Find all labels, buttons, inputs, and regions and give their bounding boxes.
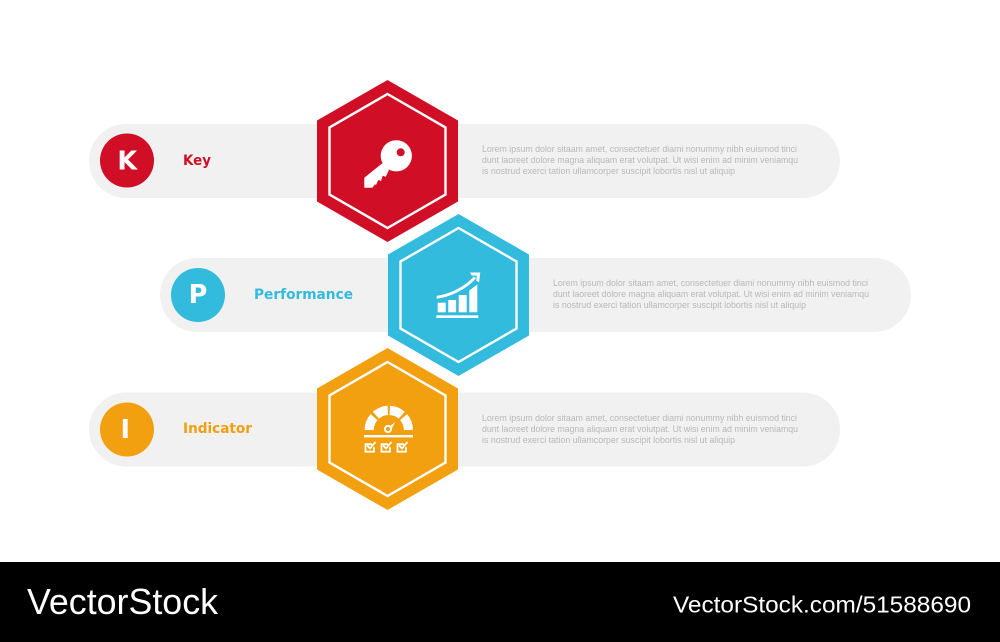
label: Key: Key	[183, 153, 211, 169]
badge: P	[171, 268, 225, 322]
text block: Performance description: dunt laoreet dolore magna aliquam erat volutpat. Ut wisi enim ad minim veniamqu	[553, 288, 869, 299]
footer bar	[0, 562, 1000, 642]
text block: Key description: is nostrud exerci tation ullamcorper suscipit lobortis nisl ut aliquip	[482, 165, 735, 176]
hexagon: Key	[317, 80, 458, 242]
icon: key	[364, 140, 412, 188]
text block: Key description: Lorem ipsum dolor sitaam amet, consectetuer diami nonummy nibh euismod tinci	[482, 143, 797, 154]
hexagon: Indicator	[317, 348, 458, 510]
footer id: VectorStock.com/51588690	[673, 591, 971, 617]
icon: growth chart	[436, 272, 480, 318]
text block: Key description: dunt laoreet dolore magna aliquam erat volutpat. Ut wisi enim ad minim veniamqu	[482, 154, 798, 165]
badge: K	[100, 134, 154, 188]
badge: P: P	[189, 280, 207, 310]
row: Indicator	[89, 392, 840, 466]
hexagon: Performance	[388, 214, 529, 376]
pill: Performance	[160, 258, 911, 332]
text block: Indicator description	[482, 412, 798, 445]
row: Key	[89, 124, 840, 198]
row: Performance	[160, 258, 911, 332]
text block: Performance description: is nostrud exerci tation ullamcorper suscipit lobortis nisl ut aliquip	[553, 299, 806, 310]
footer logo: VectorStock	[27, 581, 219, 622]
pill: Indicator	[89, 392, 840, 466]
text block: Indicator description: is nostrud exerci tation ullamcorper suscipit lobortis nisl ut aliquip	[482, 434, 735, 445]
pill: Key	[89, 124, 840, 198]
badge: I	[100, 402, 154, 456]
text block: Performance description: Lorem ipsum dolor sitaam amet, consectetuer diami nonummy nibh euismod tinci	[553, 277, 868, 288]
text block: Performance description	[553, 277, 869, 310]
text block: Key description	[482, 143, 798, 176]
badge: K: K	[117, 146, 138, 176]
text block: Indicator description: Lorem ipsum dolor sitaam amet, consectetuer diami nonummy nibh euismod tinci	[482, 412, 797, 423]
label: Indicator: Indicator	[183, 421, 253, 437]
icon: gauge with checkboxes	[364, 410, 413, 452]
text block: Indicator description: dunt laoreet dolore magna aliquam erat volutpat. Ut wisi enim ad minim veniamqu	[482, 423, 798, 434]
badge: I: I	[120, 415, 130, 445]
label: Performance: Performance	[254, 287, 353, 303]
